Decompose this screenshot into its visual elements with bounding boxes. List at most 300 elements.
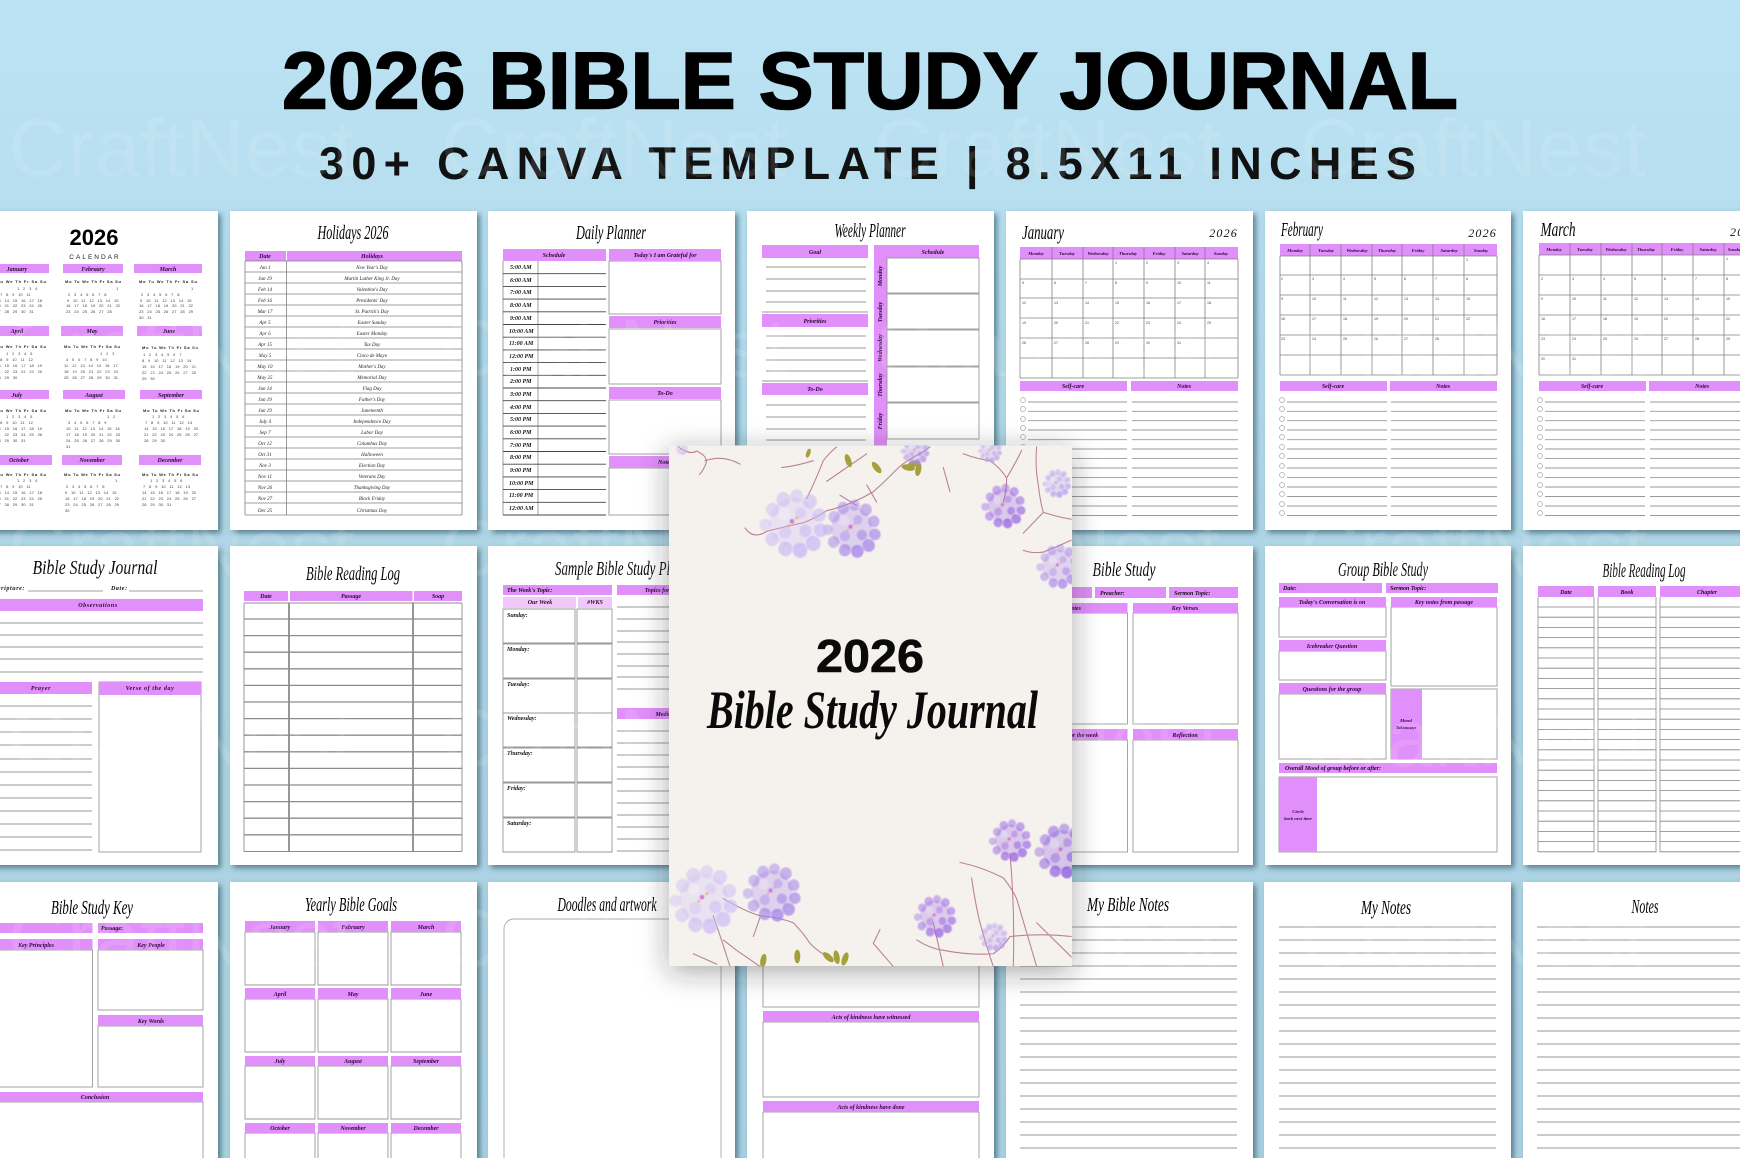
sidebar sections: Priorities xyxy=(653,320,677,326)
table header: Book xyxy=(1619,590,1634,596)
schedule column: 8:00 AM xyxy=(510,303,532,309)
schedule column: 12:00 PM xyxy=(509,354,534,360)
schedule column: 6:00 AM xyxy=(510,278,532,284)
month grid: Tuesday xyxy=(1318,248,1335,253)
month grids: 16 17 18 19 20 21 22 xyxy=(66,303,121,308)
month grid: 23 xyxy=(1541,337,1545,341)
table rows: Easter Sunday xyxy=(356,321,387,326)
notes sections xyxy=(1020,381,1238,516)
month grid: 30 xyxy=(1541,357,1545,361)
month grid: 18 xyxy=(1207,301,1211,305)
table grid xyxy=(1538,597,1740,853)
page: bible study xyxy=(1006,546,1253,865)
month grid: 14 xyxy=(1085,301,1089,305)
month headers: January xyxy=(6,267,28,273)
year: 2026 xyxy=(1209,226,1238,240)
month grid: Tuesday xyxy=(1577,247,1594,252)
month grid: 11 xyxy=(1207,281,1211,285)
month grid: 28 xyxy=(1695,337,1699,341)
table rows: July 4 xyxy=(259,420,272,425)
acts done: Acts of kindness have done xyxy=(836,1105,905,1111)
table rows: Feb 16 xyxy=(257,299,273,304)
week day grid: Wednesday: xyxy=(507,716,537,722)
top fields: Preacher: xyxy=(1100,591,1125,597)
acts done xyxy=(763,1101,979,1158)
month grids: 29 30 xyxy=(142,376,155,381)
table rows: Election Day xyxy=(358,464,386,469)
month grid: 11 xyxy=(1603,297,1607,301)
month grid: Thursday xyxy=(1378,248,1397,253)
week topic: #WKS xyxy=(586,600,603,606)
month grids: 14 15 16 17 18 19 20 xyxy=(144,426,199,431)
month grid: 5 xyxy=(1022,281,1024,285)
table rows: Nov 26 xyxy=(257,486,273,491)
table header xyxy=(245,251,462,261)
notes and key verses xyxy=(1020,603,1238,724)
month headers: May xyxy=(86,329,98,335)
table header: Date xyxy=(1559,590,1572,596)
schedule column: 1:00 PM xyxy=(510,367,532,373)
month grid: 17 xyxy=(1177,301,1181,305)
table rows: Veterans Day xyxy=(359,475,386,480)
schedule column: 9:00 PM xyxy=(510,468,532,474)
week day grid: Friday: xyxy=(507,786,526,792)
heading: February xyxy=(1280,219,1323,241)
left lists: To-Do xyxy=(807,387,823,393)
month grids: 1 2 3 4 5 6 7 xyxy=(143,352,182,357)
month headers: March xyxy=(159,267,177,273)
top blossoms xyxy=(676,436,1080,589)
month grid: 24 xyxy=(1312,337,1316,341)
month grids xyxy=(0,279,200,513)
week topic: Our Week xyxy=(528,600,552,606)
heading: Bible Study Journal xyxy=(32,557,158,579)
table rows: Dec 25 xyxy=(257,509,273,514)
table rows: Black Friday xyxy=(359,497,386,502)
prayer and reflection: Reflection xyxy=(1171,733,1198,739)
month grids: 1 xyxy=(191,286,194,291)
table header: Date xyxy=(258,254,271,260)
branches xyxy=(678,447,1072,967)
month grid xyxy=(1020,247,1238,378)
page: march xyxy=(1523,211,1740,530)
key people: Key People xyxy=(136,943,165,949)
month grid: 1 xyxy=(1726,257,1728,261)
year: 2026 xyxy=(1468,226,1497,240)
cover year: 2026 xyxy=(816,630,924,682)
page: bible study journal xyxy=(0,546,218,865)
table header: Passage xyxy=(341,594,361,600)
month headers xyxy=(0,264,202,465)
week day grid: Monday: xyxy=(506,647,529,653)
schedule strip xyxy=(874,245,979,475)
month grid xyxy=(1280,244,1497,375)
month grid: 26 xyxy=(1634,337,1638,341)
month grid: 31 xyxy=(1572,357,1576,361)
title: 2026 BIBLE STUDY JOURNAL xyxy=(282,36,1458,126)
left lists xyxy=(762,245,868,440)
watermark: CraftNest xyxy=(874,303,1221,394)
month grids: Mo Tu We Th Fr Sa Su xyxy=(139,279,198,284)
table rows: Jun 19 xyxy=(258,398,272,403)
heading: March xyxy=(1540,219,1576,241)
month grids: 30 31 xyxy=(139,315,152,320)
month grid: 5 xyxy=(1374,277,1376,281)
month grid: 7 xyxy=(1085,281,1087,285)
page: january xyxy=(1006,211,1253,530)
schedule strip: Monday xyxy=(878,266,884,287)
goal boxes: November xyxy=(339,1126,366,1132)
goal boxes: April xyxy=(273,992,287,998)
table rows: Mother's Day xyxy=(357,365,386,370)
prayer and reflection xyxy=(1020,729,1238,852)
watermark: CraftNest xyxy=(8,503,355,594)
month grid: Friday xyxy=(1412,248,1425,253)
table rows: Father's Day xyxy=(358,398,386,403)
watermark xyxy=(8,103,1647,984)
sidebar sections: Notes xyxy=(657,460,673,466)
month grid: 4 xyxy=(1603,277,1605,281)
table rows: Thanksgiving Day xyxy=(354,486,391,491)
month grid: Tuesday xyxy=(1059,251,1076,256)
schedule column: 2:00 PM xyxy=(509,379,532,385)
month grids: 1 xyxy=(116,286,119,291)
table grid xyxy=(245,261,462,515)
month grids: 3 4 5 6 7 8 9 xyxy=(68,420,107,425)
notes sections xyxy=(1280,381,1497,516)
month grid: 2 xyxy=(1541,277,1543,281)
right sections: Key notes from passage xyxy=(1414,600,1473,606)
month grid: Friday xyxy=(1671,247,1684,252)
month grids: 7 8 9 10 11 12 13 xyxy=(143,484,191,489)
schedule strip: Schedule xyxy=(922,250,945,256)
month grid: Thursday xyxy=(1637,247,1656,252)
page: bible reading log xyxy=(230,546,477,865)
month grids: Mo Tu We Th Fr Sa Su xyxy=(64,344,121,349)
conclusion xyxy=(0,1092,203,1158)
page: my notes xyxy=(1264,882,1511,1158)
table rows: Juneteenth xyxy=(361,409,383,414)
schedule strip: Thursday xyxy=(878,373,884,397)
month grid: Sunday xyxy=(1474,248,1489,253)
month grids: 17 18 19 20 21 22 23 xyxy=(66,432,121,437)
table rows: Feb 14 xyxy=(257,288,273,293)
table grid xyxy=(244,603,462,852)
observations xyxy=(0,599,203,672)
schedule column: Schedule xyxy=(543,253,566,259)
table rows: Memorial Day xyxy=(356,376,387,381)
schedule column: 12:00 AM xyxy=(509,506,534,512)
notes sections: Notes xyxy=(1176,384,1192,390)
month grid: 8 xyxy=(1726,277,1728,281)
top fields: Sermon Topic: xyxy=(1174,591,1210,597)
schedule column: 10:00 PM xyxy=(509,481,534,487)
page: holidays xyxy=(230,211,477,530)
month grid: 19 xyxy=(1374,317,1378,321)
notes sections: Self-care xyxy=(1581,384,1603,390)
table rows: Martin Luther King Jr. Day xyxy=(343,277,400,282)
left lists: Priorities xyxy=(803,319,827,325)
page: sample bible study plan xyxy=(488,546,735,865)
schedule column: 11:00 PM xyxy=(509,493,534,499)
month grid: 1 xyxy=(1466,258,1468,262)
prayer: Prayer xyxy=(31,686,51,692)
month grids: 30 xyxy=(65,508,70,513)
table rows: Mar 17 xyxy=(257,310,273,315)
month grid: 13 xyxy=(1664,297,1668,301)
table rows: Independence Day xyxy=(352,420,391,425)
month grid: 28 xyxy=(1085,341,1089,345)
month grid: 14 xyxy=(1695,297,1699,301)
month grid: 13 xyxy=(1404,297,1408,301)
month grids: 23 24 25 26 27 28 29 xyxy=(65,502,120,507)
month grid: 20 xyxy=(1054,321,1058,325)
calendar subtitle: CALENDAR xyxy=(69,254,121,261)
heading: Bible Reading Log xyxy=(306,563,400,585)
month grid: 17 xyxy=(1572,317,1576,321)
schedule strip: Tuesday xyxy=(878,301,884,322)
schedule column: 4:00 PM xyxy=(509,405,532,411)
heading: Bible Study xyxy=(1092,559,1156,581)
schedule column: 9:00 AM xyxy=(510,316,532,322)
watermark: CraftNest xyxy=(1300,103,1647,194)
page: doodles and artwork xyxy=(488,882,735,1158)
month grid: 25 xyxy=(1343,337,1347,341)
watermark: CraftNest xyxy=(441,303,788,394)
bottom leaves xyxy=(760,950,849,966)
table header: Holidays xyxy=(360,254,384,260)
month grid: 16 xyxy=(1281,317,1285,321)
month headers: November xyxy=(78,458,105,464)
month headers: October xyxy=(9,458,29,464)
watermark: CraftNest xyxy=(441,103,788,194)
week day grid xyxy=(503,609,612,852)
floral decoration xyxy=(669,436,1089,970)
heading: January xyxy=(1022,222,1064,244)
month grid: 27 xyxy=(1404,337,1408,341)
month headers: July xyxy=(11,393,23,399)
calendar title: 2026 xyxy=(70,225,118,250)
month grids: 23 24 25 26 27 28 xyxy=(66,309,113,314)
month grid: 2 xyxy=(1146,261,1148,265)
month grid: 4 xyxy=(1343,277,1345,281)
table rows: Christmas Day xyxy=(357,509,388,514)
month grids: 14 15 16 17 18 19 20 xyxy=(142,490,197,495)
month grid: 3 xyxy=(1177,261,1179,265)
heading: Notes xyxy=(1631,896,1659,918)
goal boxes xyxy=(245,921,461,1158)
month grids: 9 10 11 12 13 14 15 xyxy=(140,298,192,303)
table rows: Apr 6 xyxy=(258,332,271,337)
month grid: 26 xyxy=(1374,337,1378,341)
schedule column: 7:00 AM xyxy=(510,290,532,296)
overall mood: Circle xyxy=(1292,809,1304,814)
goal boxes: July xyxy=(274,1059,286,1065)
month grids: 16 17 18 19 20 21 22 xyxy=(139,303,194,308)
month grids: Mo Tu We Th Fr Sa Su xyxy=(142,472,199,477)
table rows: Apr 15 xyxy=(257,343,272,348)
month grid: 21 xyxy=(1435,317,1439,321)
table rows: Presidents' Day xyxy=(355,299,389,304)
month grid: 15 xyxy=(1115,301,1119,305)
month grid: 9 xyxy=(1146,281,1148,285)
month grid: 29 xyxy=(1115,341,1119,345)
table rows: Columbus Day xyxy=(357,442,388,447)
acts witnessed xyxy=(763,1011,979,1097)
goal boxes: May xyxy=(346,992,359,998)
month grid: 28 xyxy=(1435,337,1439,341)
cover page xyxy=(669,436,1089,970)
watermark: CraftNest xyxy=(8,103,355,194)
table rows: Oct 31 xyxy=(258,453,272,458)
page: group bible study xyxy=(1265,546,1511,865)
month grids: 1 2 3 4 5 xyxy=(6,351,33,356)
schedule column: 11:00 AM xyxy=(509,341,534,347)
month grid: Wednesday xyxy=(1346,248,1369,253)
heading: Yearly Bible Goals xyxy=(305,894,397,916)
month grids: Mo Tu We Th Fr Sa Su xyxy=(65,408,122,413)
month grids: 24 25 26 27 28 29 30 xyxy=(66,438,121,443)
schedule strip: Friday xyxy=(878,412,884,429)
month grid: 21 xyxy=(1695,317,1699,321)
month grid: 22 xyxy=(1115,321,1119,325)
goal boxes: December xyxy=(412,1126,439,1132)
month headers: August xyxy=(84,393,103,399)
table rows: Easter Monday xyxy=(356,332,388,337)
notes sections: Notes xyxy=(1694,384,1710,390)
table rows: Cinco de Mayo xyxy=(357,354,388,359)
month grids: 31 xyxy=(66,444,71,449)
table rows: Flag Day xyxy=(361,387,382,392)
month headers: February xyxy=(81,267,105,273)
schedule column: 10:00 AM xyxy=(509,329,534,335)
conclusion: Conclusion xyxy=(81,1095,110,1101)
prayer and reflection: Prayer for the week xyxy=(1050,733,1098,739)
observations: Observations xyxy=(78,603,118,609)
page: bible reading log right xyxy=(1523,546,1740,865)
month grid: 3 xyxy=(1572,277,1574,281)
month grids: Mo Tu We Th Fr Sa Su xyxy=(65,279,122,284)
watermark: CraftNest xyxy=(874,893,1221,984)
month grids: 9 10 11 12 13 14 15 xyxy=(67,298,119,303)
heading: My Bible Notes xyxy=(1086,894,1169,916)
month grid: 9 xyxy=(1541,297,1543,301)
month grid: 18 xyxy=(1603,317,1607,321)
month grid: 31 xyxy=(1177,341,1181,345)
table rows: May 10 xyxy=(256,365,273,370)
month headers: April xyxy=(10,329,24,335)
table rows: Tax Day xyxy=(364,343,381,348)
month grids: 1 xyxy=(115,478,118,483)
date and sermon fields: Date: xyxy=(1282,586,1297,592)
watermark: CraftNest xyxy=(8,693,355,784)
table rows: New Year's Day xyxy=(355,266,389,271)
left sections: Icebreaker Question xyxy=(1306,644,1358,650)
scripture and date fields xyxy=(0,586,203,592)
month grids: 1 2 3 4 5 6 xyxy=(150,478,183,483)
schedule column: 5:00 AM xyxy=(510,265,532,271)
month grids: 1 2 3 xyxy=(100,351,115,356)
page: daily planner xyxy=(488,211,735,530)
table rows: Halloween xyxy=(360,453,383,458)
month grid: 23 xyxy=(1146,321,1150,325)
table rows: May 25 xyxy=(256,376,273,381)
month grid: Wednesday xyxy=(1087,251,1110,256)
sidebar sections: Today's I am Grateful for xyxy=(633,253,697,259)
heading: Group Bible Study xyxy=(1338,559,1428,581)
month grid: 8 xyxy=(1466,277,1468,281)
month grids: 7 8 9 10 11 12 13 xyxy=(145,420,193,425)
key principles xyxy=(0,939,92,1087)
table rows xyxy=(256,266,400,514)
week topic xyxy=(503,585,612,608)
key words: Key Words xyxy=(137,1019,165,1025)
heading: Sample Bible Study Plan xyxy=(555,558,683,580)
goal boxes: February xyxy=(341,925,365,931)
page: acts of kindness xyxy=(747,882,994,1158)
month grids: 21 22 23 24 25 26 27 xyxy=(144,432,199,437)
month grids: 18 19 20 21 22 23 24 xyxy=(64,369,119,374)
notes sections: Self-care xyxy=(1322,384,1344,390)
ruled lines xyxy=(1020,927,1237,1148)
table rows: Jun 19 xyxy=(258,409,272,414)
month grids: 1 2 3 4 xyxy=(17,286,38,291)
goal boxes: June xyxy=(419,992,433,998)
left sections: Questions for the group xyxy=(1303,687,1361,693)
acts witnessed: Acts of kindness have witnessed xyxy=(831,1015,911,1021)
month grids: 8 9 10 11 12 13 14 xyxy=(142,358,192,363)
table rows: Labor Day xyxy=(360,431,384,436)
table rows: Nov 27 xyxy=(257,497,273,502)
month grid: 10 xyxy=(1177,281,1181,285)
prayer xyxy=(0,682,92,850)
month grid: 30 xyxy=(1146,341,1150,345)
month grid: 6 xyxy=(1404,277,1406,281)
schedule column: 5:00 PM xyxy=(510,417,532,423)
goal boxes: January xyxy=(269,925,291,931)
month grid: 10 xyxy=(1572,297,1576,301)
watermark: CraftNest xyxy=(1300,693,1647,784)
month grid: 8 xyxy=(1115,281,1117,285)
month grid: Wednesday xyxy=(1605,247,1628,252)
page: notes xyxy=(1523,882,1740,1158)
schedule strip: Wednesday xyxy=(878,334,884,362)
watermark: CraftNest xyxy=(1300,303,1647,394)
notes sections: Notes xyxy=(1435,384,1451,390)
month grid: Friday xyxy=(1153,251,1166,256)
watermark: CraftNest xyxy=(874,693,1221,784)
month grid: 27 xyxy=(1664,337,1668,341)
watermark: CraftNest xyxy=(1300,503,1647,594)
month grid: Saturday xyxy=(1699,247,1718,252)
month grid: 6 xyxy=(1664,277,1666,281)
table header xyxy=(244,591,462,601)
month grid: 10 xyxy=(1312,297,1316,301)
verse of the day: Verse of the day xyxy=(126,686,174,692)
goal boxes: August xyxy=(343,1059,362,1065)
right sections: Moral xyxy=(1399,718,1413,723)
month grid: Thursday xyxy=(1119,251,1138,256)
month grid: 25 xyxy=(1603,337,1607,341)
table rows: Jan 19 xyxy=(258,277,272,282)
month grid: Monday xyxy=(1286,248,1304,253)
month grid: 17 xyxy=(1312,317,1316,321)
month grids: Mo Tu We Th Fr Sa Su xyxy=(64,472,121,477)
goal boxes: March xyxy=(417,925,435,931)
month headers: December xyxy=(156,458,183,464)
notes and key verses: Notes xyxy=(1066,606,1082,612)
goal boxes: September xyxy=(413,1059,440,1065)
